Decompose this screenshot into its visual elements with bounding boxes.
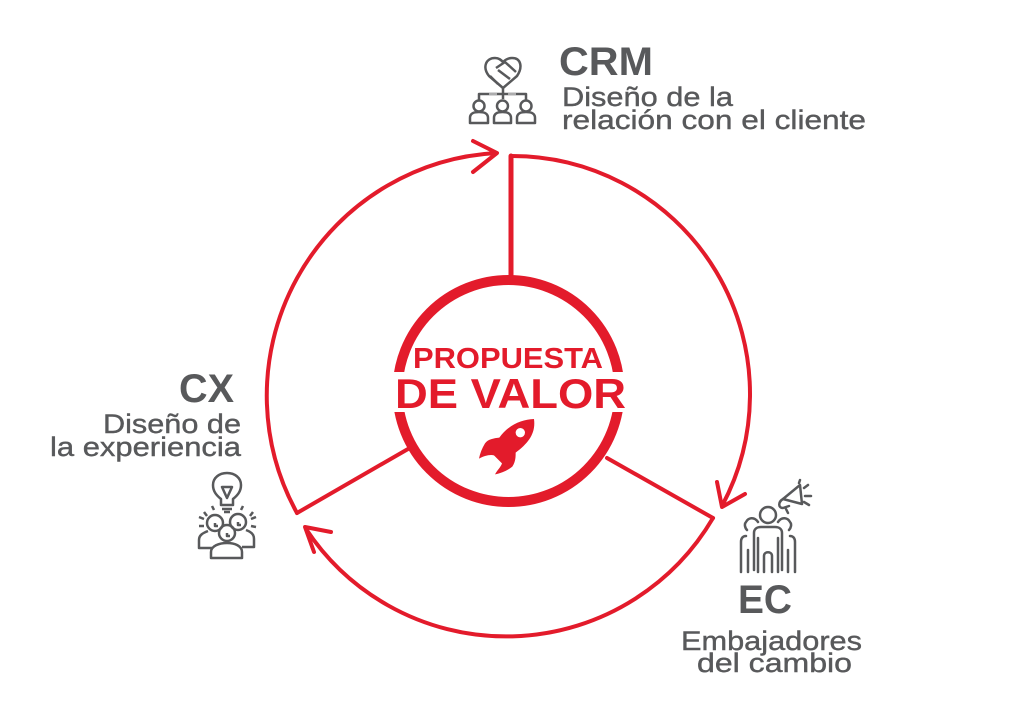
text: del cambio: del cambio xyxy=(697,648,852,678)
title: EC: EC xyxy=(738,578,792,622)
arrow: CX to CRM xyxy=(267,141,497,513)
text: embajadores: Embajadores xyxy=(681,626,862,656)
text: relación con el cliente: relación con el cliente xyxy=(562,105,866,135)
label: CX xyxy=(50,367,242,462)
text: diseño de: Diseño de xyxy=(103,409,241,439)
title: CRM: CRM xyxy=(559,40,653,84)
text: diseño de la: Diseño de la xyxy=(562,82,734,112)
heading: propuesta: PROPUESTA xyxy=(413,343,603,375)
arrow: CRM to EC xyxy=(511,156,750,507)
label: CRM xyxy=(559,40,866,135)
central circle: propuesta de valor xyxy=(385,280,635,502)
icon: rocket xyxy=(479,419,534,474)
icon: ambassadors and megaphone xyxy=(741,480,811,572)
arrow: EC to CX xyxy=(305,458,713,636)
heading: de valor: DE VALOR xyxy=(395,370,626,417)
text: la experiencia: la experiencia xyxy=(50,432,242,462)
icon: lightbulb and people xyxy=(199,473,256,558)
title: CX: CX xyxy=(179,367,234,411)
icon: handshake heart and people xyxy=(470,58,535,123)
label: EC xyxy=(681,578,862,678)
